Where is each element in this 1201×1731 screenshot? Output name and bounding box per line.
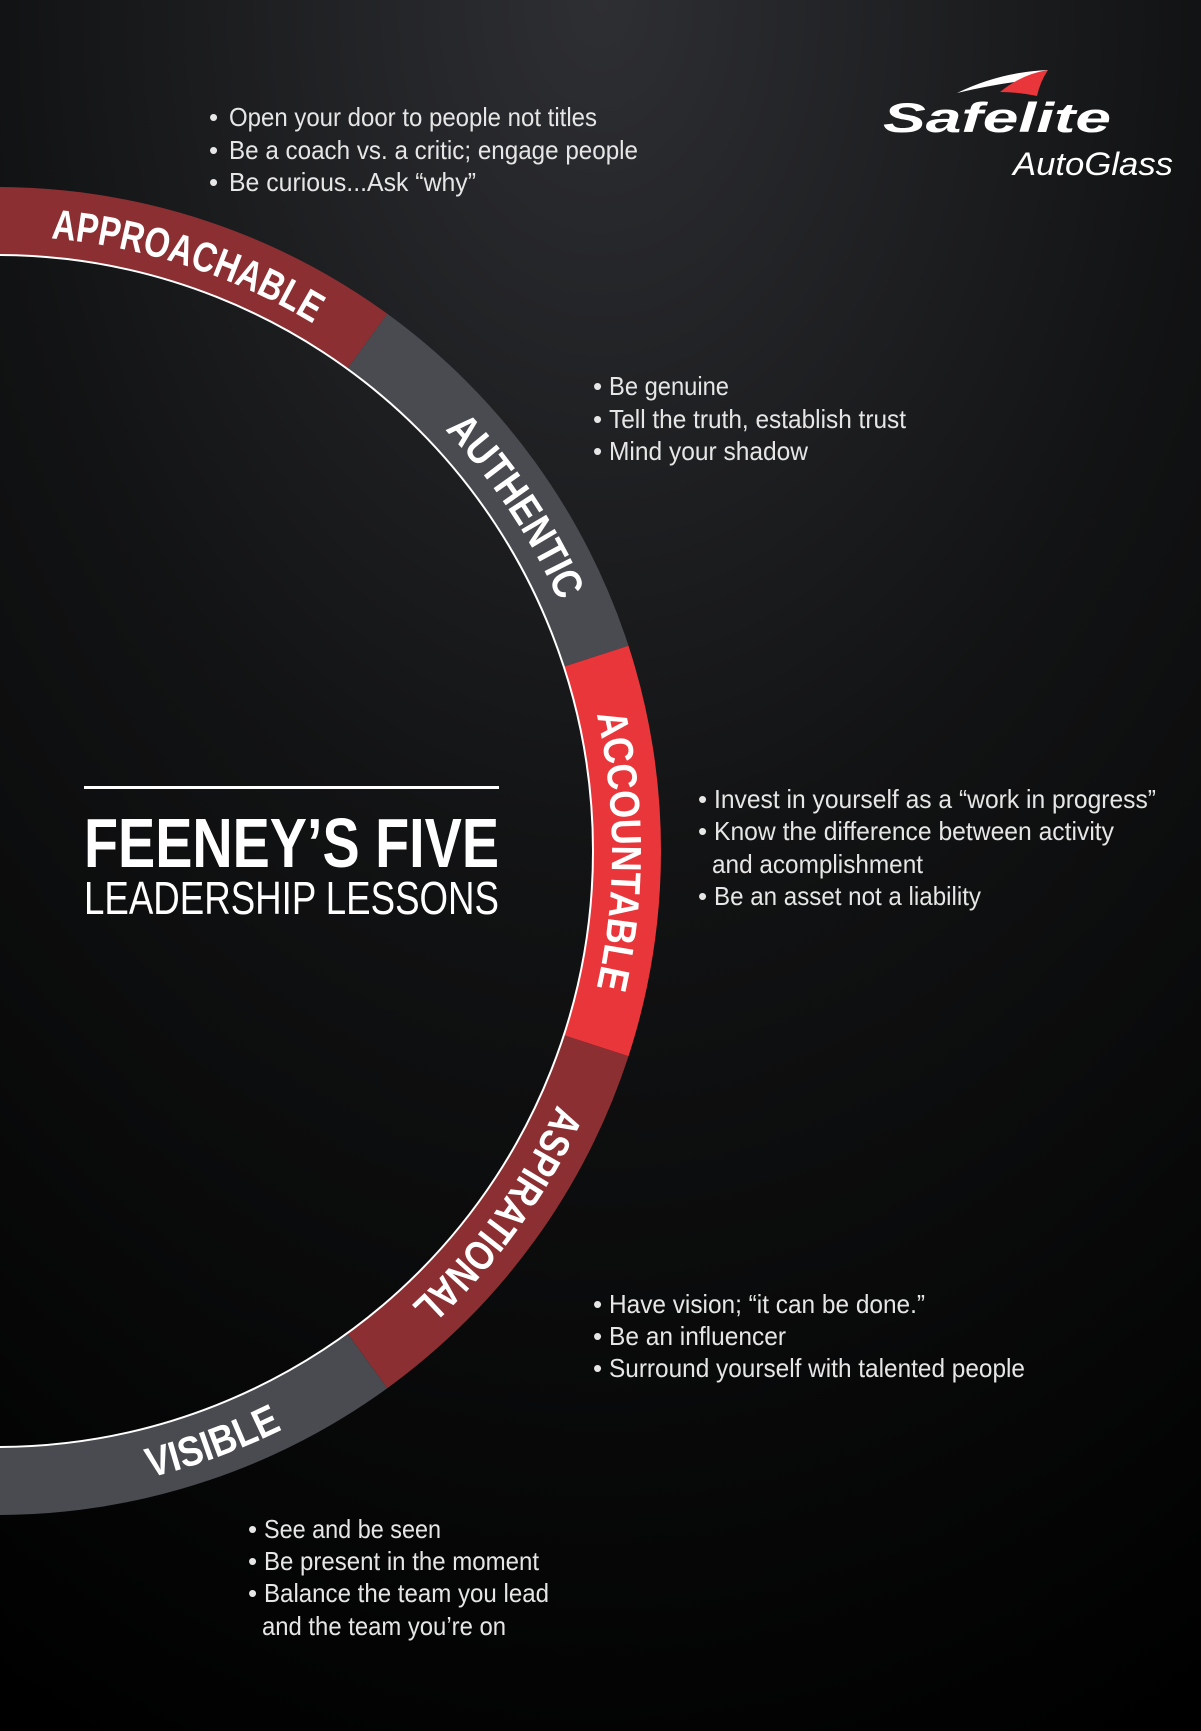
bullets: authentic: Be genuine — [609, 371, 729, 401]
bullets: visible: Balance the team you lead — [264, 1578, 549, 1608]
label: accountable: ACCOUNTABLE — [596, 715, 641, 992]
ring: leadership segments — [0, 187, 661, 1515]
bullets: authentic: • — [593, 371, 602, 401]
bullets: approachable: • — [209, 135, 218, 165]
bullets: accountable: • — [698, 816, 707, 846]
bullets: authentic: Tell the truth, establish trust — [609, 404, 907, 434]
bullets: visible: See and be seen — [264, 1514, 441, 1544]
segment: approachable — [0, 187, 387, 369]
logo: Safelite AutoGlass: AutoGlass — [1011, 146, 1173, 182]
bullets: visible: Be present in the moment — [264, 1546, 540, 1576]
bullets: accountable: • — [698, 784, 707, 814]
label: visible: VISIBLE — [143, 1404, 282, 1476]
bullets: visible: and the team you’re on — [262, 1611, 506, 1641]
bullets: accountable: Be an asset not a liability — [714, 881, 981, 911]
bullets: approachable: Be curious...Ask “why” — [229, 167, 476, 197]
bullets: aspirational: • — [593, 1289, 602, 1319]
title block: FEENEY’S FIVE — [84, 804, 499, 882]
bullets: approachable: • — [209, 102, 218, 132]
bullets: visible: • — [248, 1546, 257, 1576]
bullets: authentic — [593, 371, 907, 466]
logo: Safelite AutoGlass: Safelite — [883, 94, 1111, 141]
bullets: accountable: and acomplishment — [712, 849, 924, 879]
bullets: visible — [248, 1514, 549, 1641]
bullets: accountable: Know the difference between activity — [714, 816, 1114, 846]
bullets: visible: • — [248, 1578, 257, 1608]
bullets: authentic: • — [593, 436, 602, 466]
segment: authentic — [347, 314, 628, 667]
bullets: accountable: Invest in yourself as a “work in progress” — [714, 784, 1156, 814]
label: authentic: AUTHENTIC — [446, 418, 582, 598]
bullets: aspirational: Surround yourself with talented people — [609, 1353, 1025, 1383]
bullets: accountable — [698, 784, 1156, 911]
bullets: aspirational: • — [593, 1353, 602, 1383]
title block — [84, 786, 499, 924]
bullets: aspirational: • — [593, 1321, 602, 1351]
title block: LEADERSHIP LESSONS — [84, 872, 499, 924]
bullets: approachable — [209, 102, 638, 197]
segment: visible — [0, 1333, 387, 1515]
bullets: authentic: Mind your shadow — [609, 436, 808, 466]
segment: accountable — [564, 646, 661, 1056]
label: aspirational: ASPIRATIONAL — [412, 1105, 580, 1318]
segment: aspirational — [347, 1035, 628, 1388]
bullets: aspirational: Have vision; “it can be done.” — [609, 1289, 925, 1319]
bullets: authentic: • — [593, 404, 602, 434]
bullets: aspirational — [593, 1289, 1025, 1383]
bullets: approachable: • — [209, 167, 218, 197]
bullets: visible: • — [248, 1514, 257, 1544]
logo: Safelite AutoGlass — [883, 70, 1173, 182]
bullets: approachable: Open your door to people not titles — [229, 102, 597, 132]
bullets: accountable: • — [698, 881, 707, 911]
label: approachable: APPROACHABLE — [52, 210, 326, 323]
bullets: approachable: Be a coach vs. a critic; engage people — [229, 135, 638, 165]
bullets: aspirational: Be an influencer — [609, 1321, 786, 1351]
